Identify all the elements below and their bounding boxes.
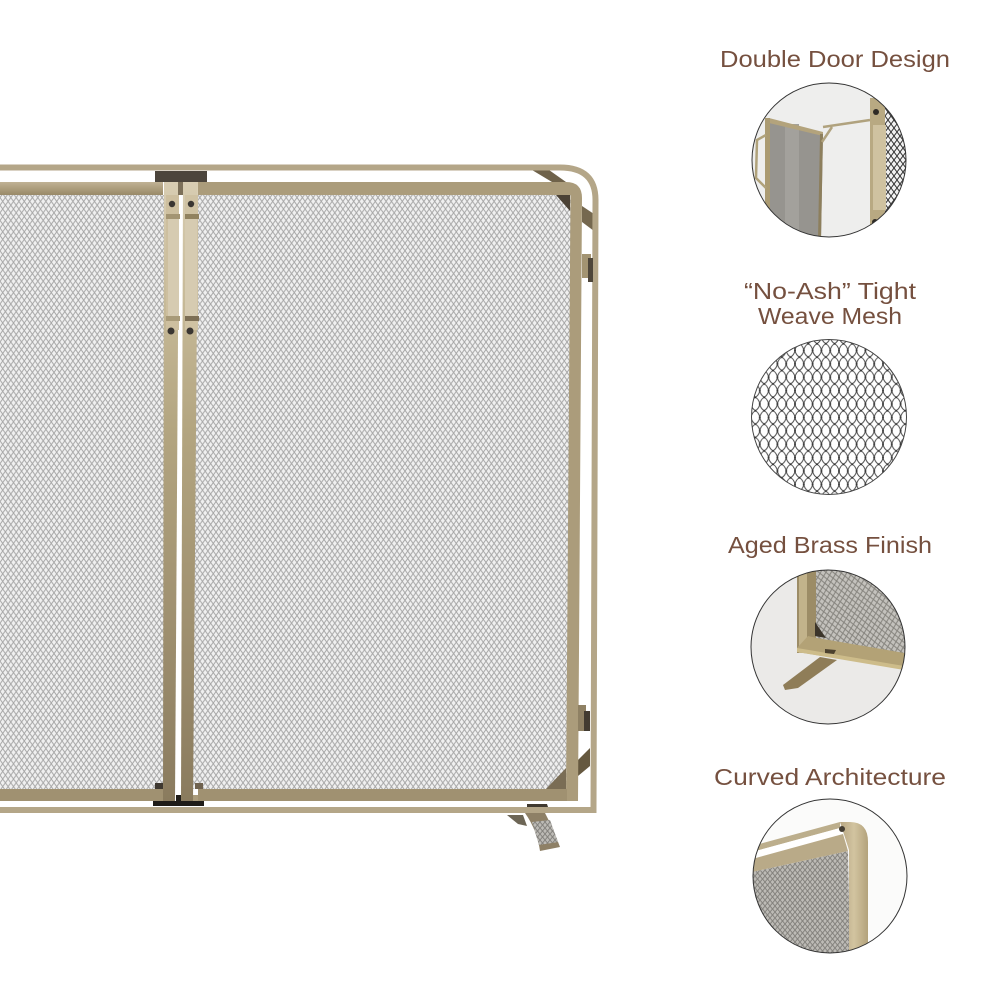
heading: Aged Brass Finish: Aged Brass Finish (728, 532, 932, 558)
door handles (166, 195, 199, 334)
left mesh panel (0, 195, 164, 789)
heading: Curved Architecture: Curved Architecture (714, 764, 946, 790)
right door frame (183, 182, 582, 801)
heading: Double Door Design: Double Door Design (720, 46, 950, 72)
mesh at right (885, 108, 906, 212)
top centre bracket (155, 171, 207, 195)
panel: fireplace screen product photo (0, 168, 596, 851)
inner door frame top (0, 182, 163, 195)
heading: No-Ash Tight Weave Mesh (744, 278, 917, 329)
left door stile (163, 182, 179, 801)
heading: No-Ash Tight Weave Mesh: “No-Ash” Tight (744, 278, 917, 304)
right mesh panel (193, 195, 571, 789)
lower hinge (578, 705, 590, 731)
photo circle: curved frame (752, 799, 907, 955)
left door frame bottom (0, 789, 164, 801)
right door stile (181, 182, 198, 801)
bottom centre bracket (153, 783, 204, 806)
rod (823, 120, 870, 127)
photo circle: mesh (752, 340, 906, 494)
stand foot (507, 804, 560, 851)
photo circle: double door (752, 83, 910, 240)
door stile (870, 98, 885, 224)
corner brackets (532, 170, 594, 789)
photo circle: aged brass (751, 565, 910, 724)
open door mesh (769, 120, 823, 240)
heading: No-Ash Tight Weave Mesh: Weave Mesh (758, 303, 902, 329)
outer frame (0, 168, 596, 810)
upper hinge (582, 254, 593, 282)
